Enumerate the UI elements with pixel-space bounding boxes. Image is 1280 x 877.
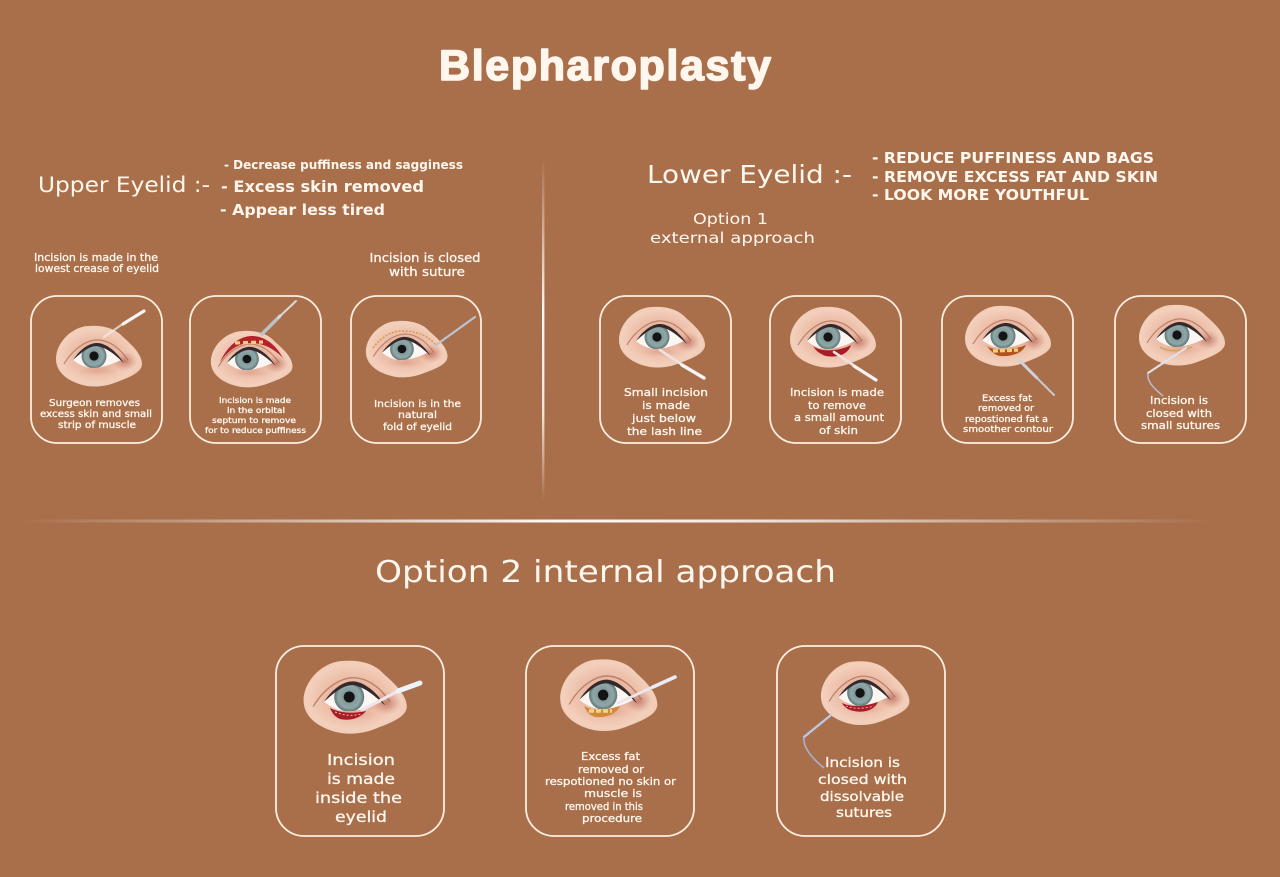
panel: upper step 1 (31, 296, 162, 443)
caption: Surgeon removes (49, 398, 140, 409)
caption: closed with (818, 772, 907, 788)
icon: eye with dissolvable sutures (804, 661, 909, 768)
caption: a small amount (794, 411, 885, 424)
caption: Excess fat (581, 751, 640, 763)
caption: to remove (808, 399, 866, 412)
caption: sutures (836, 805, 892, 821)
lower eyelid benefits: - REDUCE PUFFINESS AND BAGS (872, 149, 1154, 167)
upper note: incision crease: lowest crease of eyelid (35, 263, 159, 275)
caption: Incision is (1150, 395, 1208, 407)
vertical divider (542, 158, 544, 500)
panel: upper step 3 (351, 296, 481, 443)
upper note: incision crease (34, 252, 159, 275)
caption: fold of eyelid (383, 422, 452, 433)
caption: inside the (315, 789, 402, 807)
caption: is made (642, 399, 690, 412)
icon: eye with small sutures (1139, 305, 1225, 396)
caption: removed or (978, 404, 1034, 414)
panel: lower option 1 step 3 (942, 296, 1073, 443)
icon: eye with inner incision (304, 661, 420, 734)
panel: option 2 step 3 (777, 646, 945, 836)
caption (545, 751, 677, 825)
panel: lower option 1 step 1 (600, 296, 731, 443)
caption: dissolvable (820, 789, 904, 805)
caption: Incision is made (790, 386, 884, 399)
caption (374, 399, 461, 433)
caption: of skin (819, 424, 858, 437)
title: Blepharoplasty (439, 42, 771, 90)
caption: smoother contour (963, 425, 1053, 435)
caption (315, 751, 402, 826)
caption: procedure (582, 813, 642, 825)
caption: excess skin and small (40, 409, 152, 420)
horizontal divider (20, 520, 1210, 522)
caption: small sutures (1141, 420, 1220, 432)
caption: septum to remove (212, 416, 296, 425)
caption: just below (631, 412, 696, 425)
caption: Incision (327, 751, 395, 769)
heading: lower eyelid: Lower Eyelid :- (647, 160, 852, 189)
upper note: closed with suture: Incision is closed (370, 251, 480, 265)
caption: removed in this (565, 801, 643, 813)
caption: Small incision (624, 386, 708, 399)
icon: eye with fat removal (965, 306, 1054, 395)
caption (205, 396, 306, 435)
upper eyelid benefits: - Excess skin removed (221, 177, 424, 196)
caption: muscle is (584, 788, 642, 800)
caption: strip of muscle (58, 420, 136, 431)
lower eyelid benefits: - LOOK MORE YOUTHFUL (872, 186, 1089, 204)
caption: is made (327, 770, 395, 788)
lower eyelid benefits (872, 149, 1158, 204)
caption: natural (398, 410, 437, 421)
icon: eye with scalpel below lash (619, 307, 705, 378)
caption: Incision is made (219, 396, 291, 405)
heading: option 2: Option 2 internal approach (375, 555, 836, 590)
caption: for to reduce puffiness (205, 426, 306, 435)
caption: in the orbital (227, 406, 285, 415)
panel: lower option 1 step 2 (770, 296, 901, 443)
upper note: closed with suture: with suture (389, 265, 465, 279)
caption (40, 398, 152, 431)
icon: eye with red lower incision (790, 307, 876, 380)
caption: the lash line (627, 425, 702, 438)
panel: option 2 step 2 (526, 646, 694, 836)
caption (963, 394, 1053, 435)
caption: eyelid (335, 808, 387, 826)
panel: upper step 2 (190, 296, 321, 443)
caption: removed or (578, 764, 645, 776)
caption (818, 755, 907, 821)
panel: option 2 step 1 (276, 646, 444, 836)
upper note: closed with suture (370, 251, 480, 279)
caption: respotioned no skin or (545, 776, 677, 788)
icon: eye with open upper incision (211, 301, 296, 387)
caption: Incision is (825, 755, 900, 771)
lower eyelid benefits: - REMOVE EXCESS FAT AND SKIN (872, 168, 1158, 186)
heading: upper eyelid: Upper Eyelid :- (38, 173, 210, 197)
caption: closed with (1146, 408, 1212, 420)
icon: eye with suture (366, 317, 475, 377)
caption (1141, 395, 1220, 432)
upper eyelid benefits: - Appear less tired (220, 201, 385, 219)
upper eyelid benefits (220, 158, 463, 219)
upper eyelid benefits: - Decrease puffiness and sagginess (224, 158, 463, 172)
caption (624, 386, 708, 438)
upper note: incision crease: Incision is made in the (34, 252, 158, 264)
option 1 heading (650, 210, 815, 247)
caption (790, 386, 885, 437)
icon: eye with scalpel (56, 311, 144, 387)
option 1 heading: external approach (650, 229, 815, 247)
option 1 heading: Option 1 (693, 210, 768, 228)
icon: eye with fat repositioned (560, 659, 675, 731)
caption: repostioned fat a (965, 415, 1048, 425)
panel: lower option 1 step 4 (1115, 296, 1246, 443)
caption: Excess fat (982, 394, 1033, 404)
caption: Incision is in the (374, 399, 461, 410)
